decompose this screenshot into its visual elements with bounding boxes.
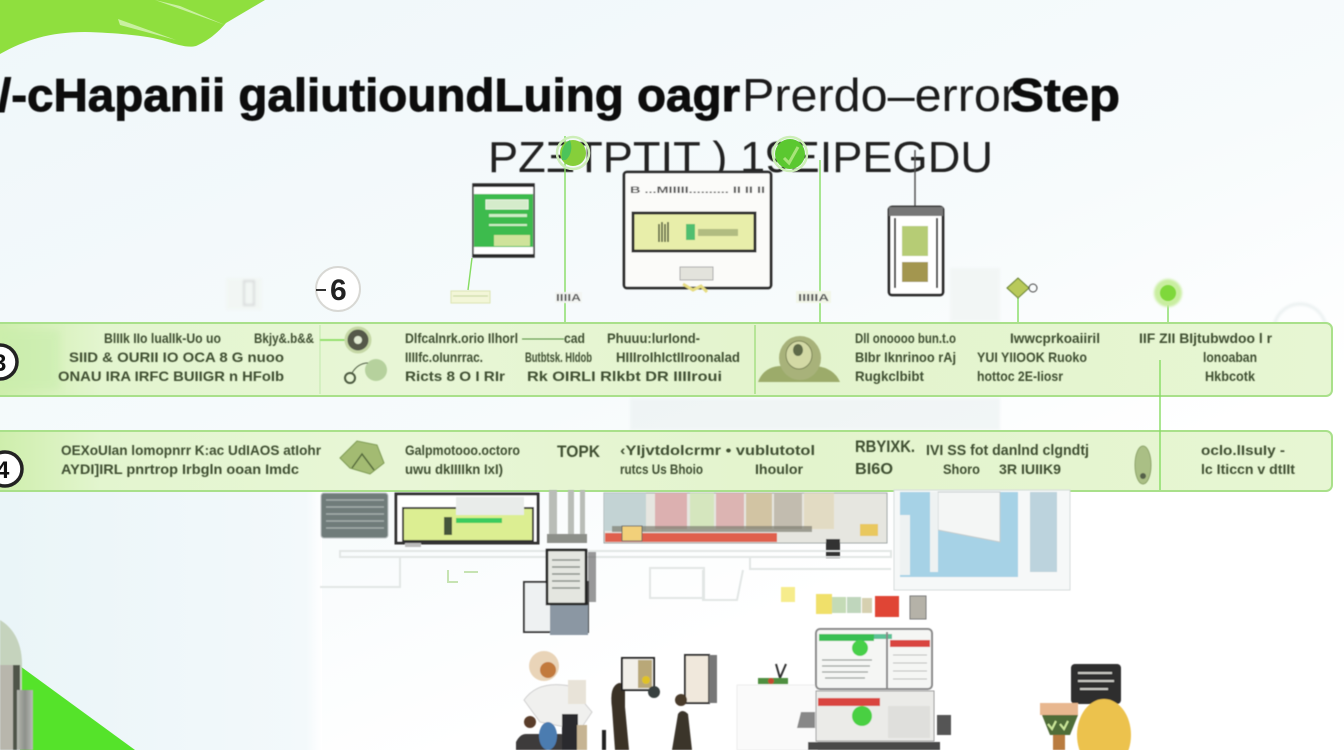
row four text column four: RBYIXK. xyxy=(855,437,915,456)
row three text column six: IIF ZII BIjtubwdoo l r xyxy=(1139,330,1273,346)
device column xyxy=(0,620,33,750)
row three text column two: cad xyxy=(564,330,585,346)
row four text column five xyxy=(1201,442,1295,477)
row three text column five: YUI YIIOOK Ruoko xyxy=(977,349,1087,365)
row three text column one: BlIIk IIo lualIk-Uo uo xyxy=(104,330,221,346)
title: /-cHapanii galiutioundLuing oagr xyxy=(0,69,740,121)
row three text column two xyxy=(405,330,722,384)
row four text column one: OEXoUIan lomopnrr K:ac UdIAOS atIohr xyxy=(61,442,322,458)
row three text column four: BIbr Iknrinoo rAj xyxy=(855,349,956,365)
lower left tint panel xyxy=(0,490,322,750)
number badge 6 xyxy=(316,267,360,311)
row four text column two: Galpmotooo.octoro xyxy=(405,442,520,458)
row three text column two: Rk OIRLI Rlkbt DR IIIIroui xyxy=(527,368,722,384)
subtitle: PZΞTPTIT ) 19ΞIPEGDU xyxy=(488,133,993,182)
icon: coiled machine xyxy=(758,336,840,382)
icon: gauge and figure xyxy=(320,328,387,383)
row four text column one: AYDI]IRL pnrtrop Irbgln ooan Imdc xyxy=(61,461,299,477)
lower illustration: people group xyxy=(516,651,717,750)
row three text column one xyxy=(58,330,314,384)
icon: seed pod xyxy=(1135,446,1151,484)
row four text column four: IVI SS fot danlnd clgndtj xyxy=(926,442,1089,459)
row four text column four: 3R IUIIK9 xyxy=(999,461,1061,477)
green corner: top left xyxy=(0,0,265,54)
row three text column four: Dll onoooo bun.t.o xyxy=(855,330,956,346)
icon: green dot xyxy=(1154,279,1182,307)
row three text column five: Iwwcprkoaiiril xyxy=(1010,330,1100,346)
row four text column four: Shoro xyxy=(943,461,980,477)
green badge right xyxy=(773,137,807,171)
small label tags: IIIIA xyxy=(556,293,581,304)
icon: green tent xyxy=(340,441,384,474)
lower illustration: chalkboard and plant xyxy=(1040,664,1131,750)
icon: phone device xyxy=(889,150,943,295)
lower illustration: gray wall panel xyxy=(321,493,388,538)
icon: central monitor xyxy=(624,172,771,292)
row four text column two: uwu dkIIIIkn IxI) xyxy=(405,461,503,477)
title: Step xyxy=(1010,69,1120,121)
icon: green leaf xyxy=(1007,278,1037,298)
row four text column three xyxy=(620,442,815,477)
row three text column three: Phuuu:lurIond- xyxy=(607,330,700,346)
lower illustration: phone kiosk xyxy=(524,550,596,635)
row three text column one: Bkjy&.b&& xyxy=(254,330,314,346)
lower illustration: sticky notes xyxy=(781,587,926,619)
row four text column four: BI6O xyxy=(855,461,893,478)
lower illustration: small plant xyxy=(758,664,788,684)
panel: row four xyxy=(0,431,1332,491)
row four badge xyxy=(0,452,22,486)
number badge 6: 6 xyxy=(330,274,347,307)
row four text column one xyxy=(61,442,322,477)
green connector lines xyxy=(468,136,1168,322)
row three text column two: Dlfcalnrk.orio Ilhorl xyxy=(405,330,518,346)
row three text column two: Ricts 8 O I RIr xyxy=(405,368,506,384)
row three badge xyxy=(0,345,17,379)
row three text column three xyxy=(607,330,740,365)
row three text column six: lonoaban xyxy=(1203,349,1257,365)
row four text column two: TOPK xyxy=(557,442,601,461)
row three text column one: ONAU IRA IRFC BUIIGR n HFoIb xyxy=(58,368,284,384)
row three text column five xyxy=(977,330,1100,384)
connector over bands xyxy=(1159,360,1161,490)
small label tags xyxy=(451,291,831,304)
row four text column three: Ihoulor xyxy=(755,461,804,477)
title: Prerdo–error xyxy=(742,69,1017,121)
row three text column two: Butbtsk. HIdob xyxy=(525,349,592,365)
lower illustration: dashboard screens xyxy=(737,629,951,750)
icon: document card xyxy=(473,184,534,257)
title xyxy=(0,69,1120,121)
lower illustration: shelf scene xyxy=(604,493,887,558)
lower illustration: counter outlines xyxy=(320,551,891,600)
row three text column four xyxy=(855,330,956,384)
row four text column five: oclo.lIsuIy - xyxy=(1201,442,1285,458)
row four text column two xyxy=(405,442,601,477)
row three text column six xyxy=(1139,330,1273,384)
row four text column five: lc Iticcn v dtIIt xyxy=(1201,461,1295,477)
row three text column four: Rugkclbibt xyxy=(855,368,924,384)
lower illustration: laptop xyxy=(396,494,538,547)
lower illustration: small green mark xyxy=(448,570,478,582)
small label tags: IIIIIA xyxy=(798,293,829,304)
row three text column three: HIIIroIhIctIIroonalad xyxy=(616,349,740,365)
row four text column four xyxy=(855,437,1089,478)
faint background icons xyxy=(226,268,1326,430)
row four text column three: ‹YIjvtdolcrmr • vublutotol xyxy=(620,442,815,458)
row three text column five: hottoc 2E-Iiosr xyxy=(977,368,1063,384)
panel: row three xyxy=(0,323,1332,396)
lower illustration: window xyxy=(894,490,1070,590)
row four text column three: rutcs Us Bhoio xyxy=(620,461,703,477)
lower illustration: towers xyxy=(547,490,587,543)
green corner: bottom left xyxy=(0,620,135,750)
row three text column one: SIID & OURII IO OCA 8 G nuoo xyxy=(69,349,284,365)
green badge left xyxy=(557,137,589,169)
row three text column six: Hkbcotk xyxy=(1205,368,1255,384)
row three text column two: IIIIfc.oIunrrac. xyxy=(405,349,483,365)
icon: central monitor: B ...MIIIII.......... II II II xyxy=(630,185,765,195)
